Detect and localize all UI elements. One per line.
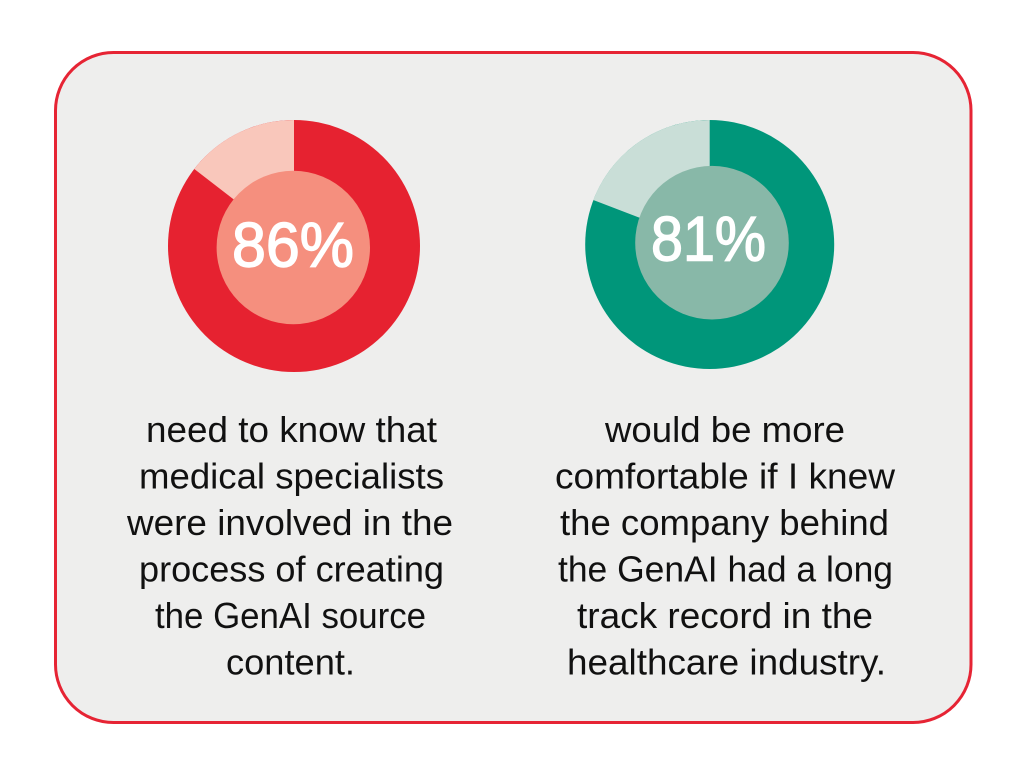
text block: left caption: content. xyxy=(226,642,355,682)
donut centre xyxy=(635,166,789,320)
text block: right caption: the company behind xyxy=(560,502,889,543)
text block: right caption: would be more xyxy=(604,409,845,450)
donut chart: 86% xyxy=(168,120,420,372)
donut centre xyxy=(217,171,370,324)
value: 81%: 81% xyxy=(651,205,766,275)
text block: right caption: comfortable if I knew xyxy=(555,456,896,496)
text block: right caption xyxy=(555,409,896,682)
donut wedge: remaining share xyxy=(194,120,294,246)
text block: left caption: medical specialists xyxy=(139,456,444,496)
text block: left caption: the GenAI source xyxy=(155,595,426,636)
text block: right caption: the GenAI had a long xyxy=(558,548,893,590)
value: 86%: 86% xyxy=(232,211,354,281)
text block: left caption: process of creating xyxy=(139,548,444,590)
donut chart: 81% xyxy=(585,120,834,369)
text block: left caption xyxy=(126,409,453,682)
donut wedge: remaining share xyxy=(593,120,710,244)
text block: right caption: healthcare industry. xyxy=(567,642,886,682)
text block: left caption: need to know that xyxy=(146,409,437,450)
text block: right caption: track record in the xyxy=(577,595,873,636)
donut ring: green share xyxy=(585,120,834,369)
panel: rounded card background xyxy=(56,52,971,722)
donut ring: red share xyxy=(168,120,420,372)
text block: left caption: were involved in the xyxy=(126,502,453,543)
